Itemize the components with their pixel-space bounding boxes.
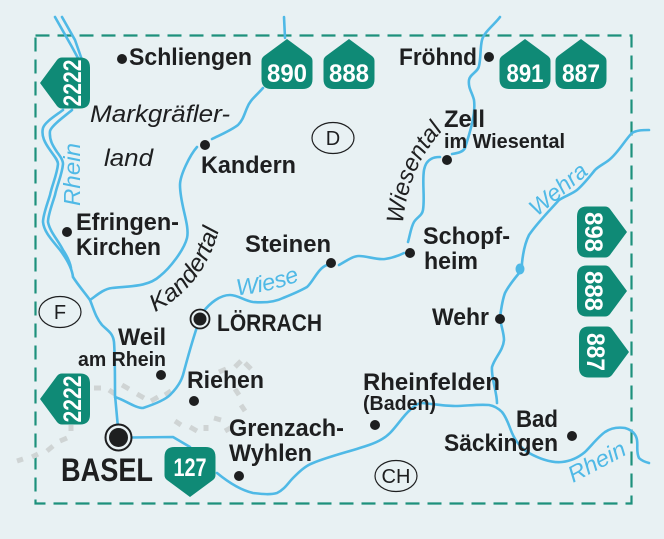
town dots: [62, 52, 577, 481]
badge 887: [556, 39, 606, 89]
town labels: Säckingen: [444, 430, 558, 457]
town labels: im Wiesental: [444, 131, 565, 153]
town labels: Rheinfelden: [363, 369, 500, 396]
badge 2222 top: 2222: [59, 60, 87, 106]
badge 887: 887: [562, 60, 600, 88]
badge 2222 bottom: [40, 374, 90, 424]
country oval D: [312, 122, 354, 154]
country oval CH: CH: [382, 466, 410, 488]
regional labels: Wiesental: [386, 118, 442, 220]
town labels: Steinen: [245, 231, 331, 258]
badge 891: 891: [506, 60, 544, 88]
marker: Basel: [106, 424, 132, 450]
river labels: Wiese: [237, 270, 298, 295]
regional labels: Markgräfler-: [90, 101, 230, 128]
country oval D: D: [326, 128, 340, 150]
town labels: LÖRRACH: [217, 310, 322, 337]
border dotted line: [17, 361, 251, 461]
regional labels: land: [104, 145, 154, 172]
badge 890: [262, 39, 312, 89]
town labels: Bad: [516, 406, 558, 433]
town labels: Efringen-: [76, 209, 179, 236]
town labels: Fröhnd: [399, 44, 477, 71]
town labels: Weil: [118, 324, 166, 351]
country oval CH: [375, 460, 417, 492]
town labels: BASEL: [61, 452, 153, 488]
river labels: Wehra: [524, 157, 592, 221]
town labels: (Baden): [363, 393, 436, 415]
regional labels: [90, 101, 442, 312]
town labels: [61, 44, 565, 488]
badge 888: 888: [329, 60, 369, 88]
marker: Lörrach: [190, 310, 210, 328]
river labels: Rhein: [563, 435, 630, 487]
town labels: Grenzach-: [229, 415, 344, 442]
town labels: Wehr: [432, 304, 489, 331]
badge 890: 890: [267, 60, 307, 88]
badge 888: [324, 39, 374, 89]
river labels: Rhein: [59, 143, 85, 206]
badge 2222 top: [40, 58, 90, 108]
badge 891: [500, 39, 550, 89]
dashed frame: [36, 36, 632, 504]
river labels: [59, 126, 630, 492]
town labels: Zell: [444, 106, 485, 133]
badge 2222 bottom: 2222: [59, 376, 87, 422]
badge 887 right: [579, 326, 629, 378]
badge 888 right: [577, 266, 627, 316]
badge 127: 127: [174, 454, 206, 482]
regional labels: Kandertal: [150, 224, 218, 312]
badge 887 right: 887: [581, 333, 609, 371]
town labels: Schliengen: [129, 44, 252, 71]
town labels: heim: [424, 248, 478, 275]
town labels: Kandern: [201, 152, 296, 179]
badge 898: [577, 206, 627, 258]
badge 127: [164, 447, 216, 497]
badge 898: 898: [579, 212, 607, 252]
town labels: Kirchen: [76, 234, 161, 261]
badge 888 right: 888: [579, 271, 607, 311]
town labels: am Rhein: [78, 349, 166, 371]
country oval F: F: [54, 302, 66, 324]
town labels: Riehen: [187, 367, 264, 394]
town labels: Schopf-: [423, 223, 510, 250]
lake on Wehra: [516, 264, 524, 274]
country oval F: [39, 296, 81, 328]
town labels: Wyhlen: [229, 440, 312, 467]
